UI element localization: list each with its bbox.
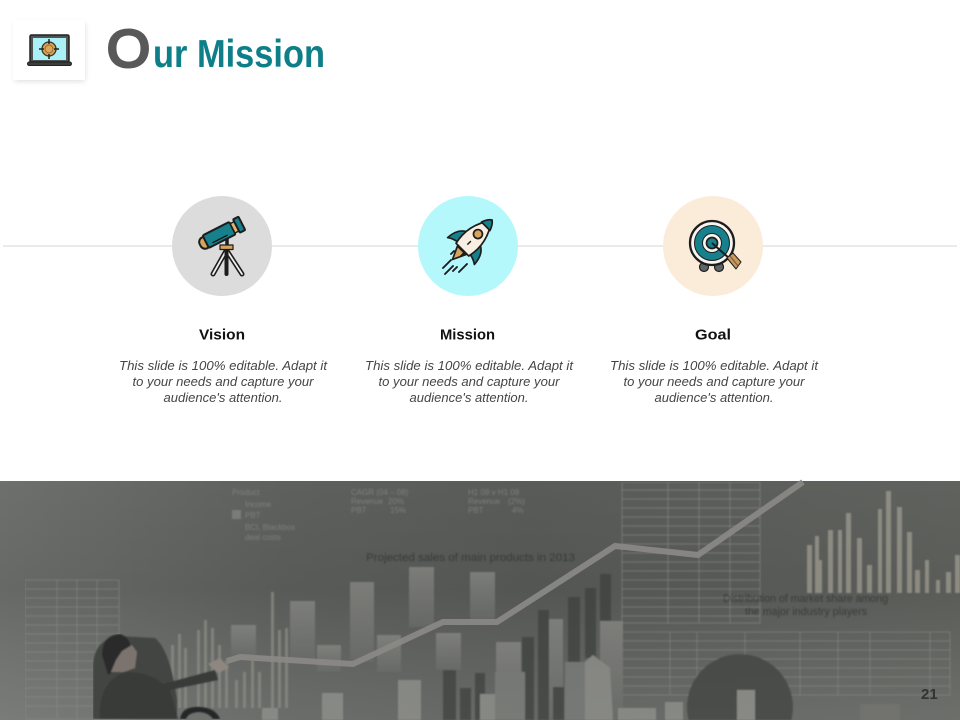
vision circle	[172, 196, 272, 296]
column: mission	[365, 196, 574, 405]
faint legend text: 20%	[388, 497, 404, 506]
mission heading: Mission	[440, 328, 495, 344]
city skyline	[262, 655, 900, 720]
faint legend text: 15%	[390, 506, 406, 515]
faint legend text: 4%	[512, 506, 524, 515]
faint legend text: PBT	[245, 511, 261, 520]
page number: 21	[921, 686, 938, 703]
title	[107, 20, 325, 78]
faint legend text: PBT	[468, 506, 484, 515]
faint legend text: Product	[232, 488, 260, 497]
left data table	[25, 580, 119, 719]
dark pie circle	[687, 654, 793, 720]
businessman in chair	[93, 634, 229, 719]
chart captions: the major industry players	[745, 606, 867, 618]
mission circle	[418, 196, 518, 296]
chart captions	[366, 552, 888, 618]
mission description: to your needs and capture your	[378, 375, 560, 389]
goal circle	[663, 196, 763, 296]
vision description: to your needs and capture your	[132, 375, 314, 389]
icon: target with arrow	[690, 221, 741, 272]
faint legend text: H1 09 v H1 08	[468, 488, 520, 497]
background photo panel: business analytics	[0, 481, 960, 720]
goal description: This slide is 100% editable. Adapt it	[610, 359, 819, 373]
vision description	[119, 359, 328, 405]
title: ur Mission	[153, 33, 325, 76]
faint legend text: PBT	[351, 506, 367, 515]
icon: telescope	[197, 217, 245, 274]
rising trend line	[227, 482, 803, 664]
faint legend text: Revenue	[351, 497, 384, 506]
goal description	[610, 359, 819, 405]
middle data table	[622, 482, 760, 623]
faint legend text: CAGR (04 – 08)	[351, 488, 409, 497]
header icon: laptop with target	[13, 20, 85, 81]
chart captions: Projected sales of main products in 2013	[366, 552, 575, 564]
title: O	[107, 20, 150, 78]
vision heading: Vision	[199, 328, 245, 344]
lower data table	[622, 632, 950, 695]
goal description: audience's attention.	[654, 391, 774, 405]
faint legend text: (2%)	[508, 497, 525, 506]
faint legend text	[232, 488, 525, 542]
timeline divider	[3, 246, 957, 247]
goal description: to your needs and capture your	[624, 375, 805, 389]
column chart	[231, 567, 623, 720]
faint legend text: BCI, Blackbox	[245, 523, 295, 532]
right thin bars	[807, 491, 960, 593]
faint legend text: Income	[245, 500, 272, 509]
chart captions: Distribution of market share among	[723, 593, 888, 605]
left thin bars	[171, 592, 288, 708]
mission description: audience's attention.	[410, 391, 528, 405]
faint legend text: Revenue	[468, 497, 501, 506]
dark columns	[443, 574, 611, 720]
vision description: audience's attention.	[164, 391, 282, 405]
column: goal	[610, 196, 819, 405]
goal heading: Goal	[695, 328, 731, 344]
mission description: This slide is 100% editable. Adapt it	[365, 359, 574, 373]
icon: rocket	[439, 206, 506, 274]
column: vision	[119, 196, 328, 405]
vision description: This slide is 100% editable. Adapt it	[119, 359, 328, 373]
faint legend text: deal costs	[245, 533, 281, 542]
mission description	[365, 359, 574, 405]
